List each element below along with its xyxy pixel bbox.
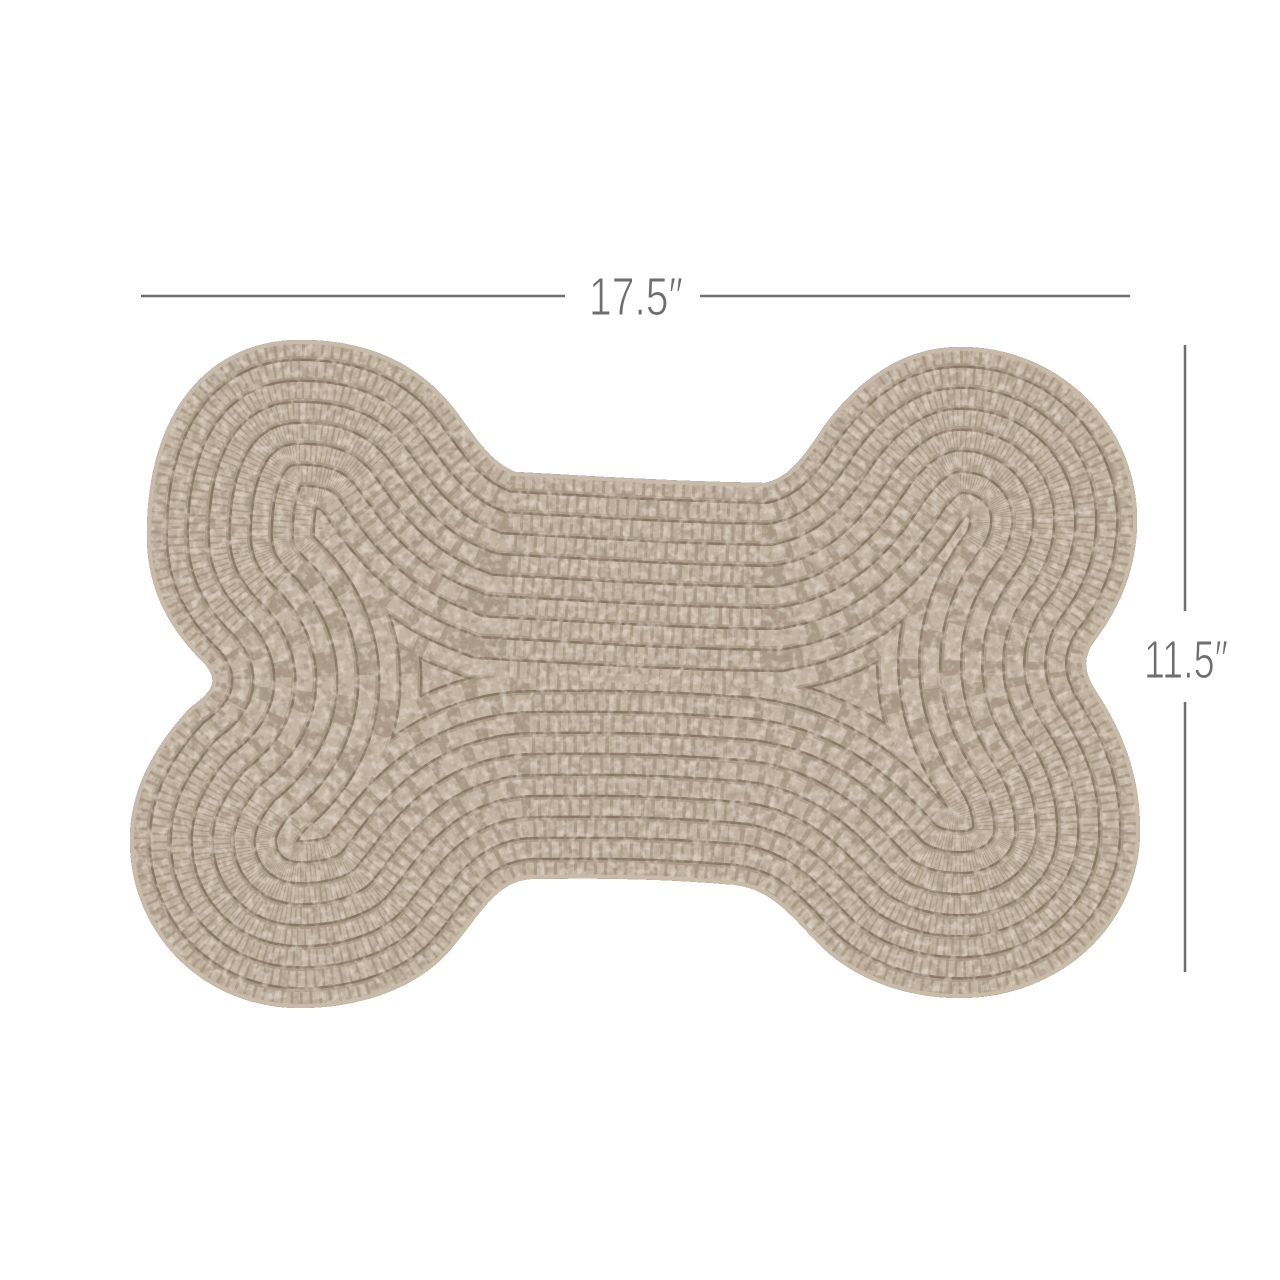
- width dimension line: 17.5 inches: 17.5″: [589, 267, 683, 327]
- braided bone-shaped rug: [120, 330, 1150, 1020]
- height dimension line: 11.5 inches: 11.5″: [1144, 630, 1228, 690]
